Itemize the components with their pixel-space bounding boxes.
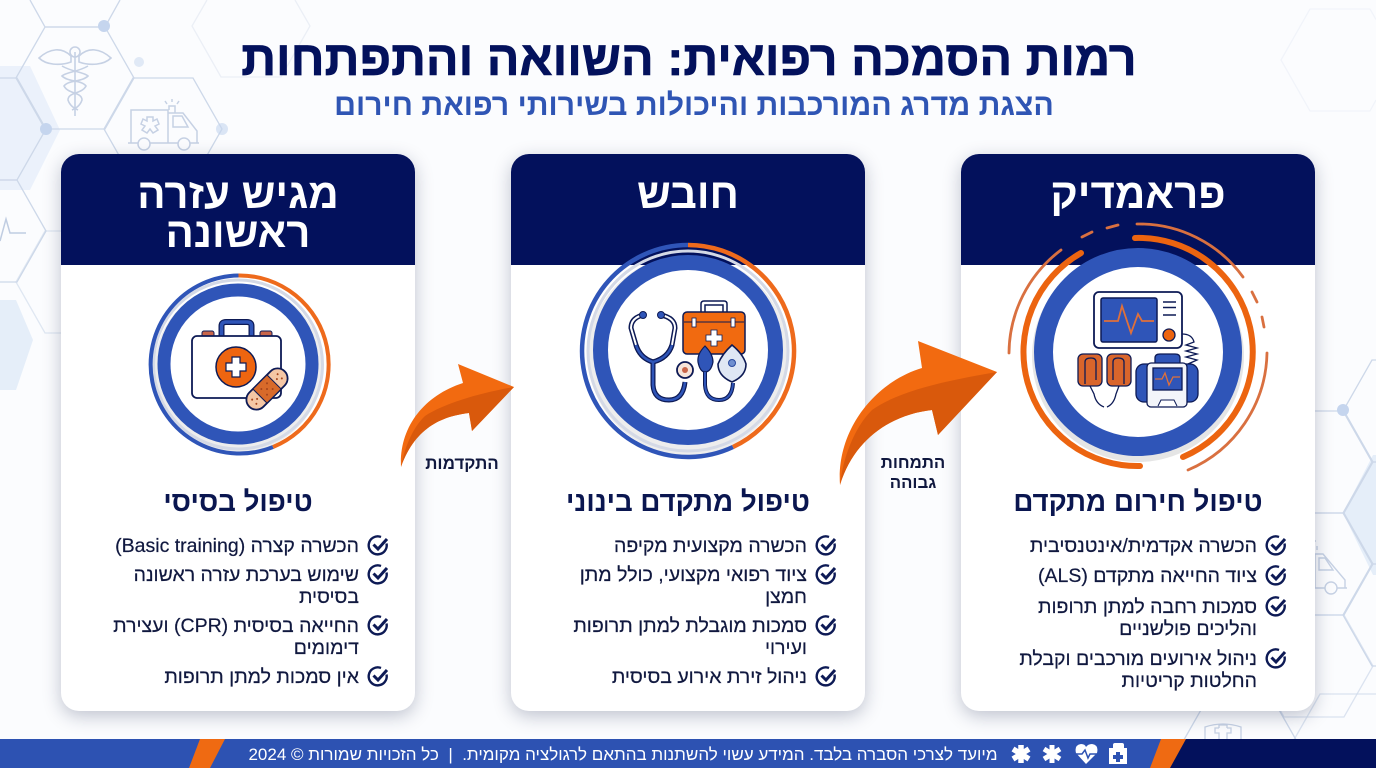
icon: check xyxy=(815,535,836,556)
icon: check xyxy=(815,615,836,636)
list item: broad authority: והליכים פולשניים xyxy=(1119,618,1257,640)
label: high specialization: התמחות xyxy=(881,453,945,472)
list item: complex incidents: ניהול אירועים מורכבים וקבלת xyxy=(1019,648,1257,670)
icon: check xyxy=(1265,565,1286,586)
list item: training: הכשרה מקצועית מקיפה xyxy=(614,535,807,557)
list item: equipment xyxy=(580,564,836,608)
list item: equipment: חמצן xyxy=(765,586,807,608)
heading: emt: חובש xyxy=(637,170,739,217)
list item: equipment: ציוד רפואי מקצועי, כולל מתן xyxy=(580,564,807,586)
list item: complex incidents: החלטות קריטיות xyxy=(1121,670,1257,692)
subheading: advanced emergency care: טיפול חירום מתקדם xyxy=(1013,486,1263,517)
icon: check xyxy=(1265,535,1286,556)
panel: emt xyxy=(511,154,865,711)
icon: background medical cross xyxy=(1204,723,1242,739)
subheading: basic care: טיפול בסיסי xyxy=(163,486,313,517)
list item: cpr: דימומים xyxy=(294,637,359,659)
footer shapes xyxy=(189,739,1376,768)
title: רמות הסמכה רפואית: השוואה והתפתחות xyxy=(241,32,1137,86)
list item: first aid kit: בסיסית xyxy=(299,586,359,608)
list item: als: ציוד החייאה מתקדם (ALS) xyxy=(1038,565,1257,587)
icon: background ambulance xyxy=(128,99,199,151)
list item: training: הכשרה אקדמית/אינטנסיבית xyxy=(1030,535,1257,557)
panel: first responder xyxy=(61,154,415,711)
list item: broad authority: סמכות רחבה למתן תרופות xyxy=(1038,596,1257,618)
icon: check xyxy=(815,564,836,585)
panel: paramedic xyxy=(961,154,1315,711)
arrow: progress xyxy=(400,364,514,467)
list item: limited authority: סמכות מוגבלת למתן תרופות xyxy=(573,615,807,637)
subheading: intermediate care: טיפול מתקדם בינוני xyxy=(566,486,810,517)
footer icons xyxy=(1012,743,1127,764)
icon: check xyxy=(1265,648,1286,669)
heading: emt xyxy=(511,154,865,265)
heading: first responder: מגיש עזרה xyxy=(137,170,339,217)
label: progress: התקדמות xyxy=(425,454,499,473)
heading: first responder xyxy=(61,154,415,265)
list item: cpr: החייאה בסיסית (CPR) ועצירת xyxy=(113,615,359,637)
icon: check xyxy=(815,666,836,687)
list item: limited authority xyxy=(573,615,836,659)
heading: first responder: ראשונה xyxy=(166,209,310,256)
heading: paramedic xyxy=(961,154,1315,265)
icon: check xyxy=(367,535,388,556)
subtitle: הצגת מדרג המורכבות והיכולות בשירותי רפואת חירום xyxy=(334,89,1054,122)
icon: check xyxy=(367,564,388,585)
list item: broad authority xyxy=(1038,596,1286,640)
icon: check xyxy=(1265,596,1286,617)
icon: background caduceus xyxy=(38,46,112,116)
icon: background ambulance right xyxy=(1315,540,1347,595)
label: high specialization xyxy=(881,453,945,492)
footer text: מיועד לצרכי הסברה בלבד. המידע עשוי להשתנות בהתאם לרגולציה מקומית. | כל הזכויות שמורות © 2024 xyxy=(248,745,998,764)
icon: check xyxy=(367,666,388,687)
icon: background ecg line xyxy=(0,216,26,242)
list item: no medication: אין סמכות למתן תרופות xyxy=(164,666,359,688)
list item: cpr xyxy=(113,615,388,659)
list item: first aid kit xyxy=(134,564,388,608)
heading: paramedic: פראמדיק xyxy=(1050,170,1226,217)
list item: limited authority: ועירוי xyxy=(765,637,807,659)
icon: check xyxy=(367,615,388,636)
arrow: high specialization xyxy=(840,341,997,485)
list item: first aid kit: שימוש בערכת עזרה ראשונה xyxy=(134,564,359,586)
list item: scene management: ניהול זירת אירוע בסיסית xyxy=(612,666,807,688)
list item: training: הכשרה קצרה (Basic training) xyxy=(115,535,359,557)
footer bar xyxy=(0,739,1376,768)
label: high specialization: גבוהה xyxy=(890,473,936,492)
list item: complex incidents xyxy=(1019,648,1286,692)
